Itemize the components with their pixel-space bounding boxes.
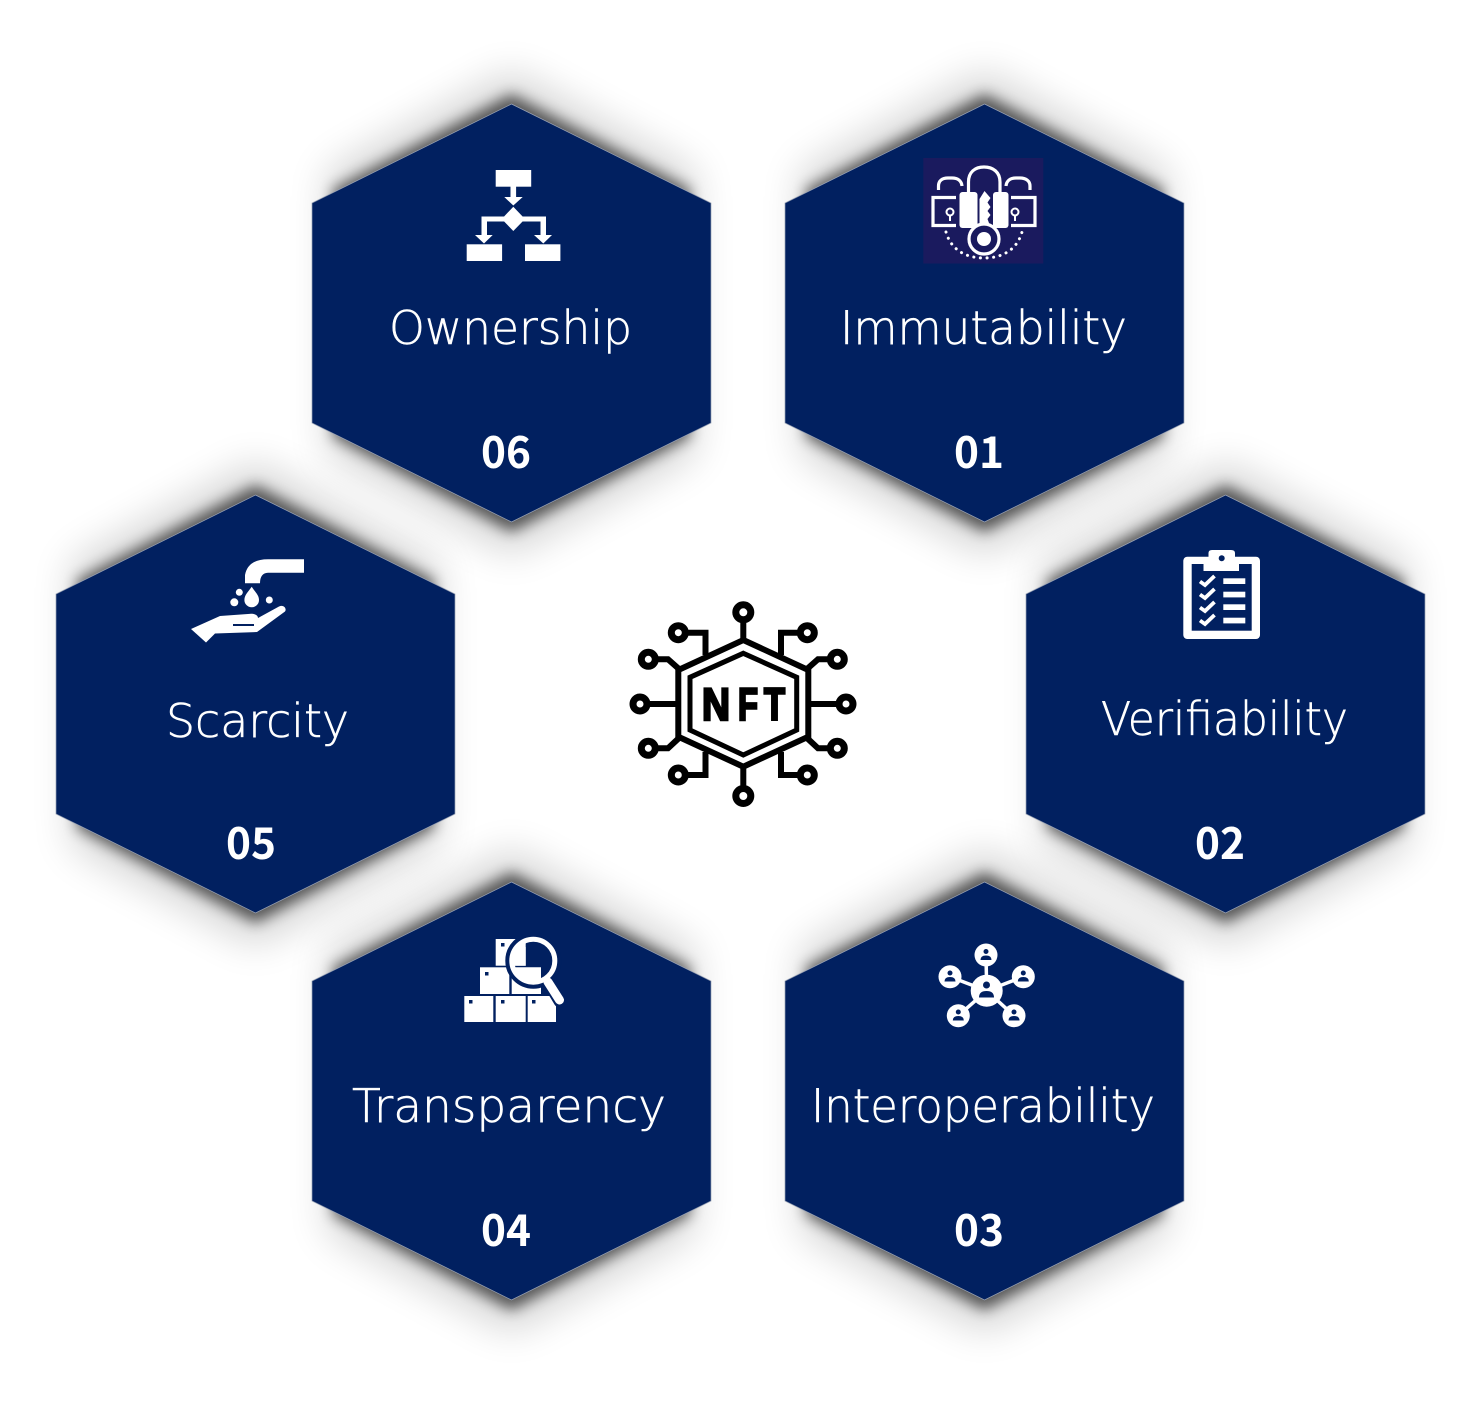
number: 02: 02 — [1195, 808, 1245, 872]
icon: flowchart — [467, 170, 560, 261]
number: 01: 01 — [954, 417, 1004, 481]
icon: boxes under magnifier — [464, 936, 560, 1022]
label: Interoperability: Interoperability — [811, 1079, 1155, 1133]
icon: central NFT circuit hexagon — [633, 605, 853, 804]
panel: immutability hexagon — [785, 72, 1184, 554]
label: Verifiability: Verifiability — [1101, 692, 1348, 746]
label: Ownership: Ownership — [389, 301, 632, 355]
panel: transparency hexagon — [312, 850, 711, 1332]
label: Immutability: Immutability — [840, 301, 1127, 355]
icon: tap and hand — [191, 559, 304, 642]
number: 03: 03 — [954, 1195, 1004, 1259]
label: NFT: N — [702, 679, 730, 730]
number: 06: 06 — [481, 417, 531, 481]
number: 05: 05 — [226, 808, 276, 872]
icon: clipboard checklist — [1183, 550, 1260, 639]
panel: verifiability hexagon — [1026, 463, 1425, 945]
number: 04: 04 — [481, 1195, 531, 1259]
icon: people network — [938, 944, 1035, 1027]
panel: scarcity hexagon — [56, 463, 455, 945]
panel: interoperability hexagon — [785, 850, 1184, 1332]
label: NFT — [702, 679, 785, 730]
label: Scarcity: Scarcity — [166, 694, 349, 748]
label: NFT: F — [738, 679, 758, 730]
label: Transparency: Transparency — [352, 1079, 666, 1133]
label: NFT: T — [764, 679, 785, 730]
panel: ownership hexagon — [312, 72, 711, 554]
icon: locks and key — [923, 158, 1043, 264]
